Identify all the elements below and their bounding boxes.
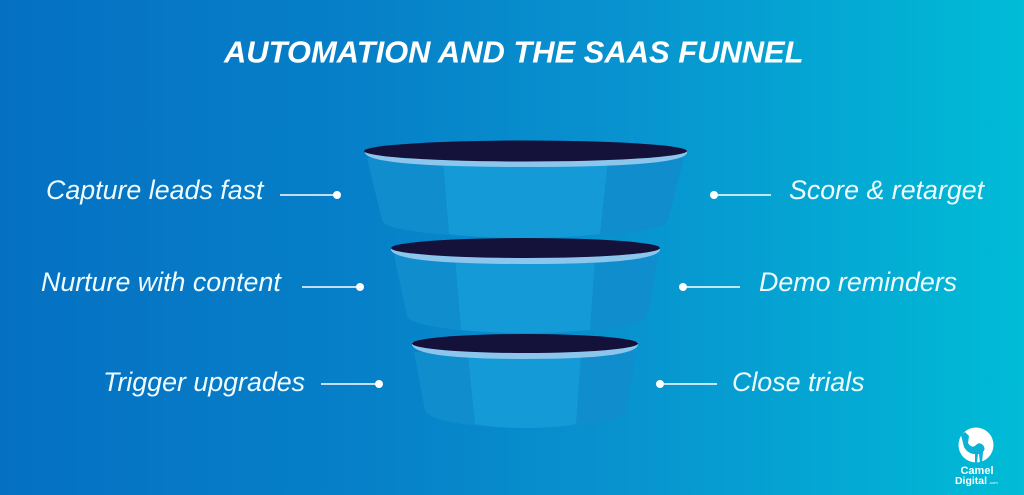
logo: Camel Digital: Digital	[955, 475, 987, 487]
label: Close trials: Close trials	[732, 367, 865, 397]
logo: Camel Digital: .com	[989, 480, 998, 485]
logo: Camel Digital	[955, 428, 998, 487]
funnel tier 3	[412, 334, 638, 428]
funnel tier 1	[364, 140, 687, 238]
label: Demo reminders: Demo reminders	[759, 267, 957, 297]
label: Trigger upgrades: Trigger upgrades	[103, 367, 305, 397]
logo: Camel Digital: Camel	[960, 465, 994, 477]
label: Nurture with content: Nurture with content	[41, 267, 282, 297]
funnel tier 2	[391, 238, 660, 333]
label: Score & retarget: Score & retarget	[789, 175, 986, 205]
title: AUTOMATION AND THE SAAS FUNNEL	[223, 34, 803, 70]
label: Capture leads fast: Capture leads fast	[46, 175, 265, 205]
label: Close trials	[656, 367, 865, 397]
